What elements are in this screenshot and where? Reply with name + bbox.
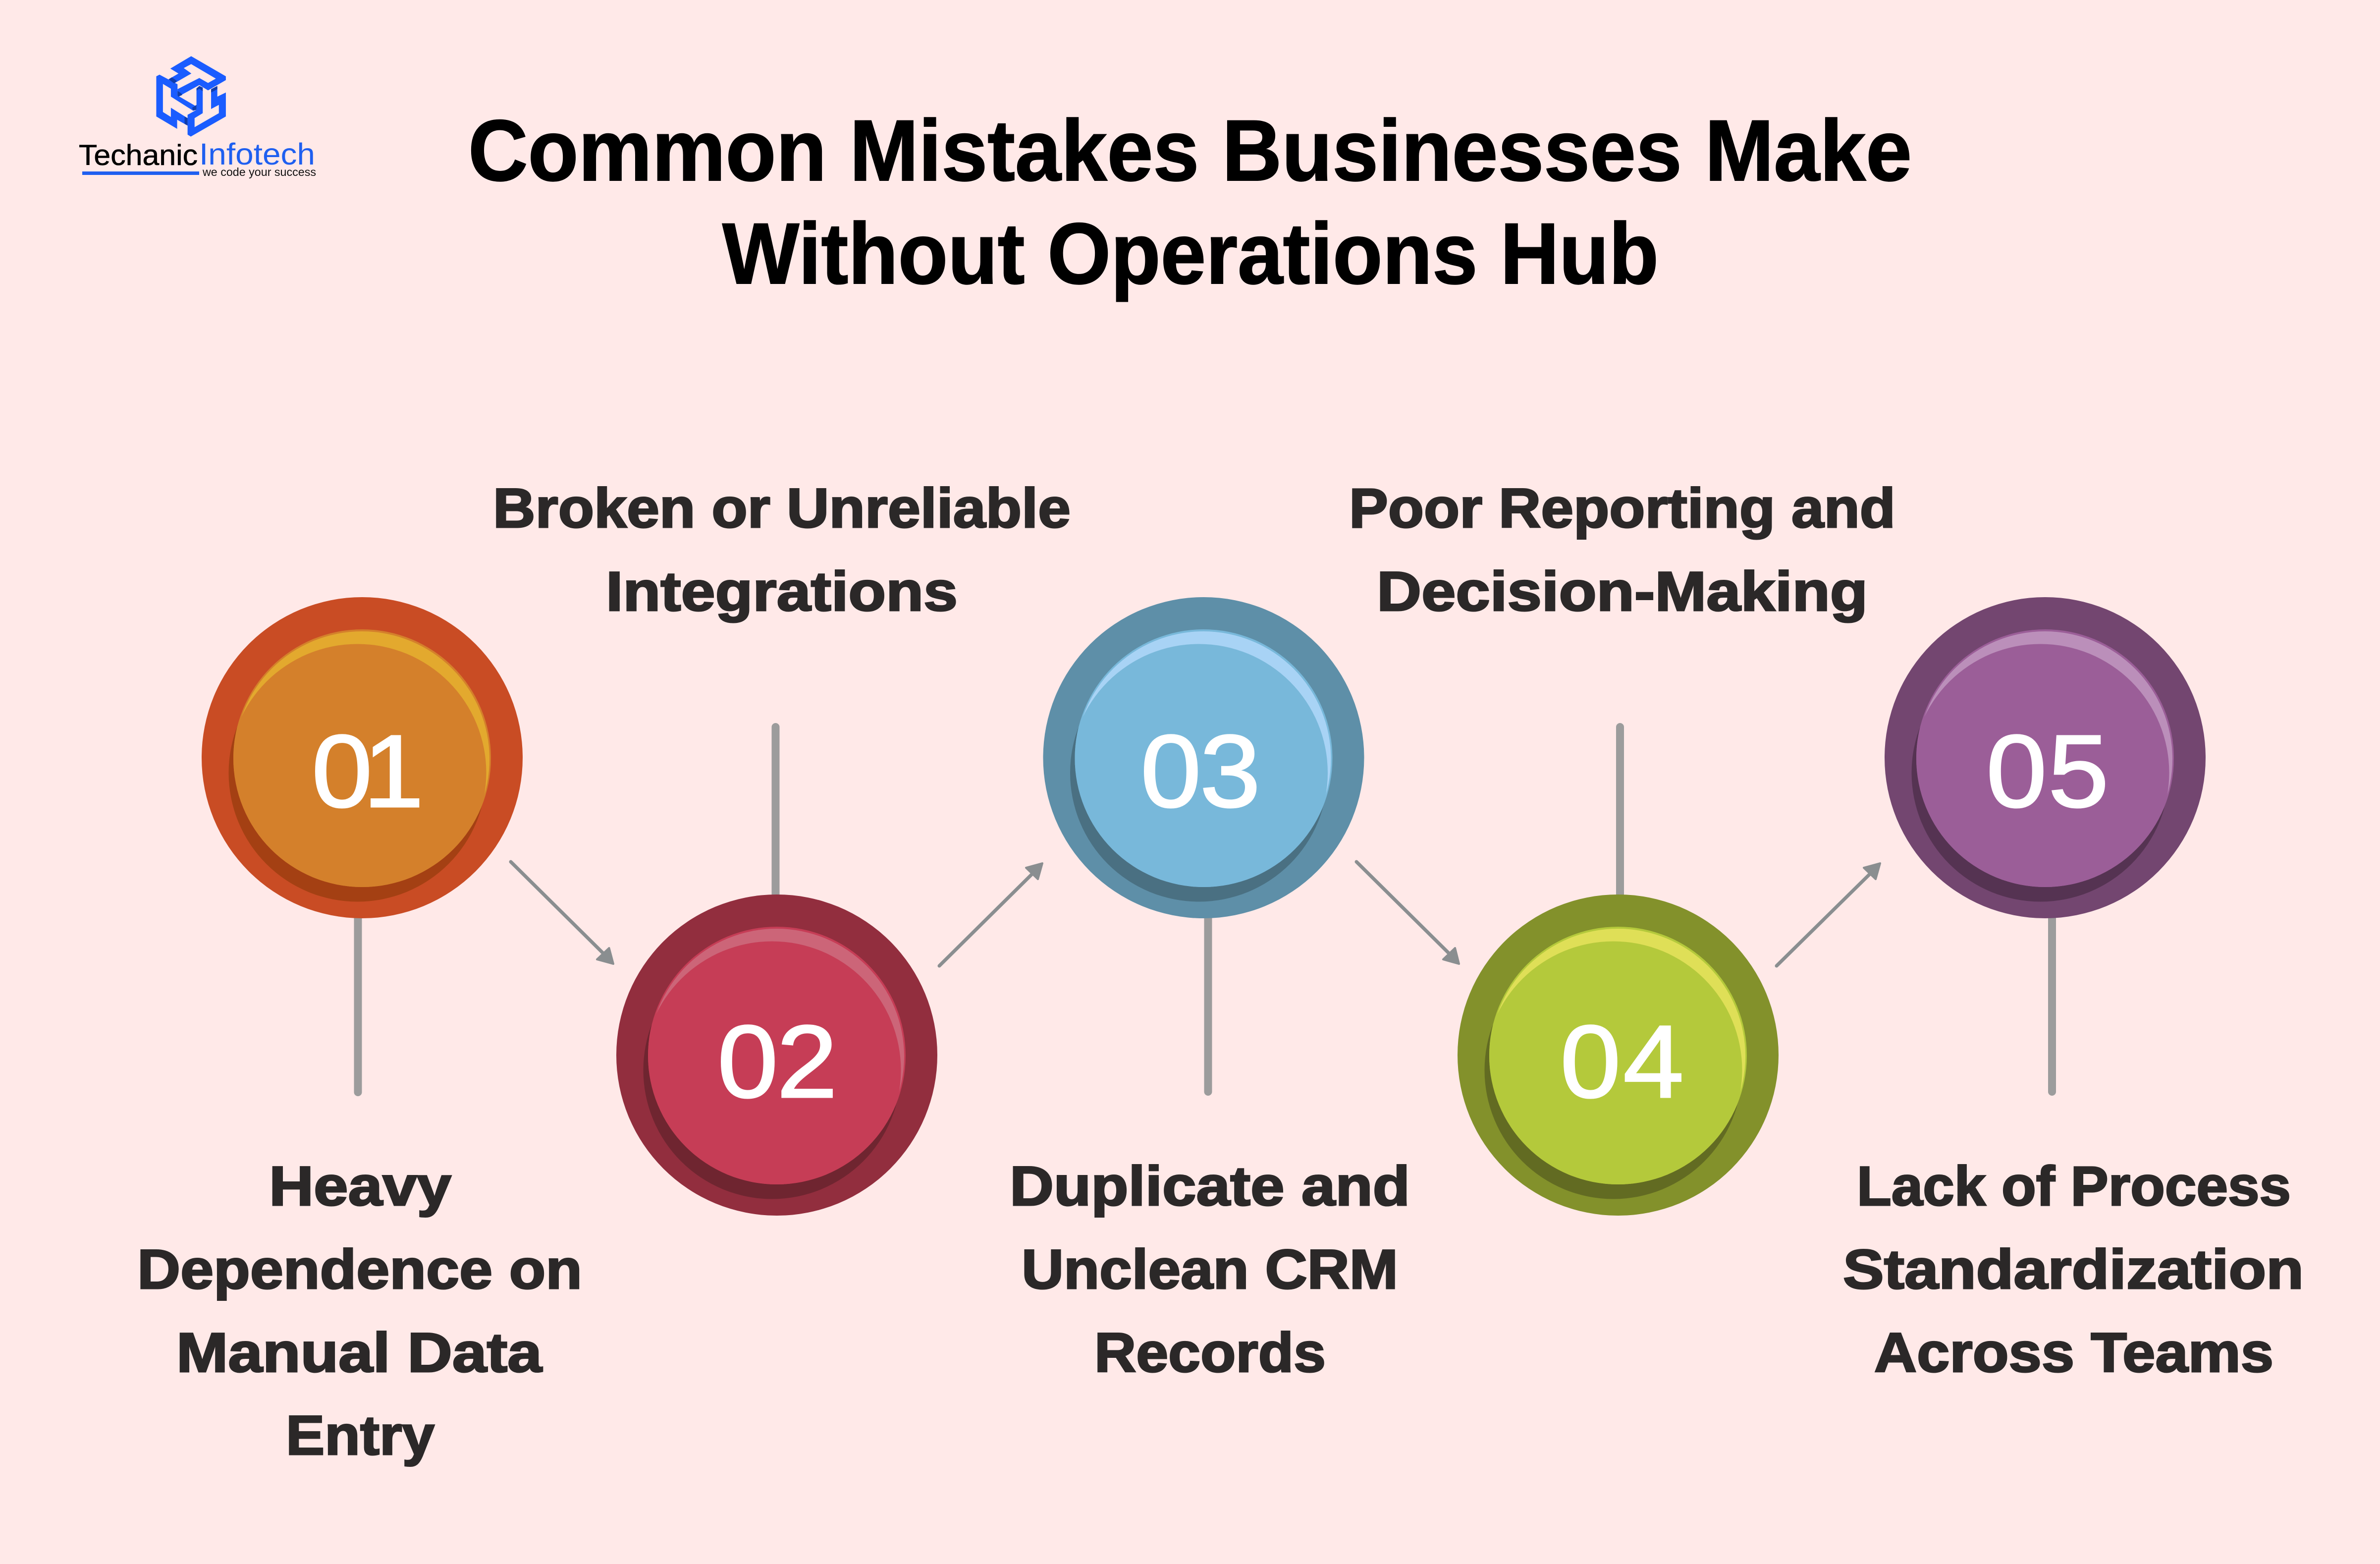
text block: Lack of Process Standardization Across Teams: Lack of Process [1857, 1155, 2291, 1217]
arrow: step 2 to step 3 [939, 863, 1042, 966]
title: Without Operations Hub [722, 206, 1659, 302]
text block: Broken or Unreliable Integrations: Integrations [606, 560, 958, 622]
title: Common Mistakes Businesses Make [468, 103, 1912, 199]
connector line: step 4 [1616, 727, 1624, 902]
text block: Broken or Unreliable Integrations: Broken or Unreliable [493, 477, 1071, 539]
number 04: 04 [1560, 1005, 1684, 1119]
step 4 badge [1458, 894, 1779, 1216]
arrow: step 4 to step 5 [1777, 863, 1880, 966]
number 01: 01 [312, 714, 424, 829]
logo wordmark: Techanic: Techanic [79, 139, 198, 171]
step 5 badge [1885, 597, 2206, 918]
text block: Broken or Unreliable Integrations [493, 477, 1071, 622]
logo: Techanic Infotech [79, 56, 316, 178]
step 2 badge [616, 894, 937, 1216]
text block: Lack of Process Standardization Across Teams: Standardization [1843, 1238, 2304, 1300]
text block: Lack of Process Standardization Across Teams [1843, 1155, 2304, 1384]
connector line: step 3 [1204, 912, 1212, 1092]
icon: isometric cube mark [156, 56, 226, 137]
arrow: step 1 to step 2 [511, 862, 613, 964]
text block: Heavy Dependence on Manual Data Entry [137, 1155, 582, 1466]
text block: Poor Reporting and Decision-Making: Poor Reporting and [1349, 477, 1895, 539]
connector line: step 1 [354, 912, 362, 1092]
text block: Poor Reporting and Decision-Making: Decision-Making [1377, 560, 1868, 622]
title [468, 103, 1912, 302]
number 03: 03 [1140, 714, 1260, 829]
text block: Duplicate and Unclean CRM Records: Unclean CRM [1022, 1238, 1398, 1300]
logo tagline: we code your success [202, 166, 316, 178]
step 3 badge [1043, 597, 1364, 918]
text block: Duplicate and Unclean CRM Records: Duplicate and [1010, 1155, 1410, 1217]
text block: Heavy Dependence on Manual Data Entry: Manual Data [176, 1322, 542, 1384]
text block: Duplicate and Unclean CRM Records [1010, 1155, 1410, 1384]
connector line: step 2 [772, 727, 780, 902]
text block: Heavy Dependence on Manual Data Entry: Heavy [269, 1155, 451, 1217]
text block: Duplicate and Unclean CRM Records: Records [1094, 1322, 1326, 1384]
connector line: step 5 [2048, 912, 2056, 1092]
text block: Heavy Dependence on Manual Data Entry: Entry [286, 1404, 434, 1466]
text block: Lack of Process Standardization Across Teams: Across Teams [1874, 1322, 2273, 1384]
logo underline [82, 171, 199, 175]
text block: Heavy Dependence on Manual Data Entry: Dependence on [137, 1238, 582, 1300]
logo wordmark: Infotech: Infotech [199, 137, 315, 171]
step 1 badge [202, 597, 523, 918]
number 05: 05 [1986, 714, 2109, 829]
arrow: step 3 to step 4 [1356, 862, 1459, 964]
text block: Poor Reporting and Decision-Making [1349, 477, 1895, 622]
number 02: 02 [717, 1005, 837, 1119]
